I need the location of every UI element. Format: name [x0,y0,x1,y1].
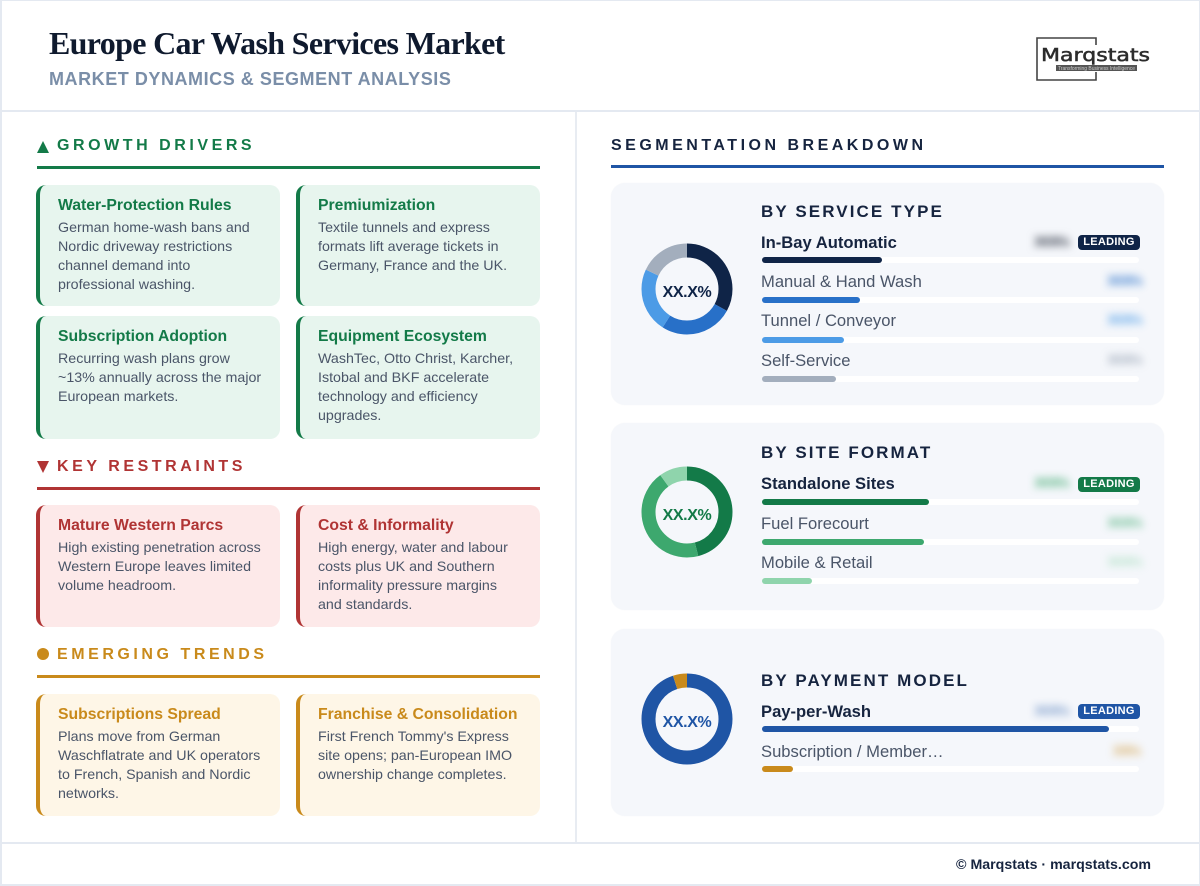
card: cost and informality: costs plus UK and Southern [318,559,495,575]
card: premiumization: formats lift average tickets in [318,239,499,255]
row: subscription / member: X.X% [1112,743,1138,760]
donut: site format: XX.X% [663,507,712,524]
card: cost and informality: High energy, water and labour [318,540,508,556]
card: equipment ecosystem: Equipment Ecosystem [318,328,487,345]
row: fuel forecourt: XX.X% [1107,515,1139,532]
row: pay-per-wash: Pay-per-Wash [761,702,871,721]
row: fuel forecourt [761,512,1146,545]
panel: by payment model [611,629,1164,816]
panel heading: BY SITE FORMAT [761,443,932,462]
row: self-service [761,351,1144,382]
card: equipment ecosystem: WashTec, Otto Christ, Karcher, [318,351,513,367]
row: in-bay automatic: LEADING [1083,236,1135,248]
header [0,0,1200,112]
section heading: emerging trends: EMERGING TRENDS [57,646,268,663]
card: franchise and consolidation: Franchise & Consolidation [318,706,518,723]
card: mature western parcs: High existing penetration across [58,540,261,556]
card: franchise and consolidation [296,694,540,816]
card: mature western parcs: Western Europe leaves limited [58,559,251,575]
card: subscriptions spread: Plans move from German [58,729,220,745]
card: subscription adoption: European markets. [58,389,178,405]
logo: Marqstats [1041,46,1150,66]
row: mobile and retail: Mobile & Retail [761,553,873,572]
logo [1036,37,1150,81]
row: manual and hand wash [761,270,1146,303]
card: premiumization: Textile tunnels and express [318,220,490,236]
row: mobile and retail [761,553,1144,584]
card: subscriptions spread: to French, Spanish and Nordic [58,767,250,783]
row: pay-per-wash: LEADING [1083,705,1135,717]
card: water-protection rules: professional washing. [58,277,195,293]
card: subscription adoption: ~13% annually across the major [58,370,261,386]
card: mature western parcs: volume headroom. [58,578,176,594]
row: standalone sites: Standalone Sites [761,474,895,493]
card: premiumization: Germany, France and the UK. [318,258,507,274]
card: franchise and consolidation: First French Tommy's Express [318,729,509,745]
row: in-bay automatic: In-Bay Automatic [761,233,897,252]
row: tunnel / conveyor: Tunnel / Conveyor [761,311,896,330]
row: standalone sites: XX.X% [1034,475,1066,492]
card: franchise and consolidation: site opens; pan-European IMO [318,748,512,764]
donut: site format [642,466,732,558]
card: subscription adoption: Subscription Adoption [58,328,227,345]
section heading: key restraints: KEY RESTRAINTS [57,458,246,475]
card: subscriptions spread: Waschflatrate and UK operators [58,748,260,764]
card: subscriptions spread: networks. [58,786,119,802]
card: equipment ecosystem: upgrades. [318,408,381,424]
row: tunnel / conveyor: XX.X% [1107,312,1139,329]
row: in-bay automatic [761,231,1140,263]
card: water-protection rules [36,185,280,306]
card: cost and informality: informality pressure margins [318,578,497,594]
card: subscriptions spread [36,694,280,816]
logo: Transforming Business Intelligence [1058,66,1135,72]
row: subscription / member [761,741,1144,772]
card: franchise and consolidation: ownership change completes. [318,767,507,783]
row: manual and hand wash: XX.X% [1107,273,1139,290]
row: pay-per-wash [761,701,1140,732]
row: tunnel / conveyor [761,310,1146,343]
card: premiumization [296,185,540,306]
panel heading: BY PAYMENT MODEL [761,671,969,690]
footer credit: © Marqstats · marqstats.com [956,857,1151,873]
donut: payment model: XX.X% [663,714,712,731]
title: Europe Car Wash Services Market [49,25,505,61]
card: subscription adoption [36,316,280,439]
card: premiumization: Premiumization [318,197,435,214]
panel heading: BY SERVICE TYPE [761,202,944,221]
donut: payment model [642,674,732,764]
row: subscription / member: Subscription / Member… [761,742,944,761]
card: equipment ecosystem: Istobal and BKF accelerate [318,370,489,386]
row: self-service: XX.X% [1107,352,1139,369]
subtitle: MARKET DYNAMICS & SEGMENT ANALYSIS [49,69,451,89]
donut: service type: XX.X% [663,284,712,301]
row: in-bay automatic: XX.X% [1034,234,1066,251]
footer [0,842,1200,886]
row: standalone sites [761,472,1140,505]
card: cost and informality [296,505,540,627]
row: fuel forecourt: Fuel Forecourt [761,514,869,533]
card: equipment ecosystem: technology and efficiency [318,389,478,405]
row: manual and hand wash: Manual & Hand Wash [761,272,922,291]
card: mature western parcs [36,505,280,627]
card: mature western parcs: Mature Western Parcs [58,517,223,534]
card: cost and informality: and standards. [318,597,412,613]
column divider [575,112,577,842]
row: pay-per-wash: XX.X% [1034,703,1066,720]
row: mobile and retail: XX.X% [1107,554,1139,571]
row: standalone sites: LEADING [1083,478,1135,490]
card: cost and informality: Cost & Informality [318,517,454,534]
row: self-service: Self-Service [761,351,850,370]
card: water-protection rules: German home-wash bans and [58,220,250,236]
card: water-protection rules: channel demand into [58,258,190,274]
card: subscription adoption: Recurring wash plans grow [58,351,230,367]
panel: by site format [611,423,1164,610]
card: water-protection rules: Nordic driveway restrictions [58,239,232,255]
panel: by service type [611,183,1164,405]
card: water-protection rules: Water-Protection Rules [58,197,232,214]
section heading: growth drivers: GROWTH DRIVERS [57,137,255,154]
section heading: segmentation breakdown: SEGMENTATION BREAKDOWN [611,137,927,154]
card: equipment ecosystem [296,316,540,439]
donut: service type [642,244,732,334]
card: subscriptions spread: Subscriptions Spread [58,706,221,723]
